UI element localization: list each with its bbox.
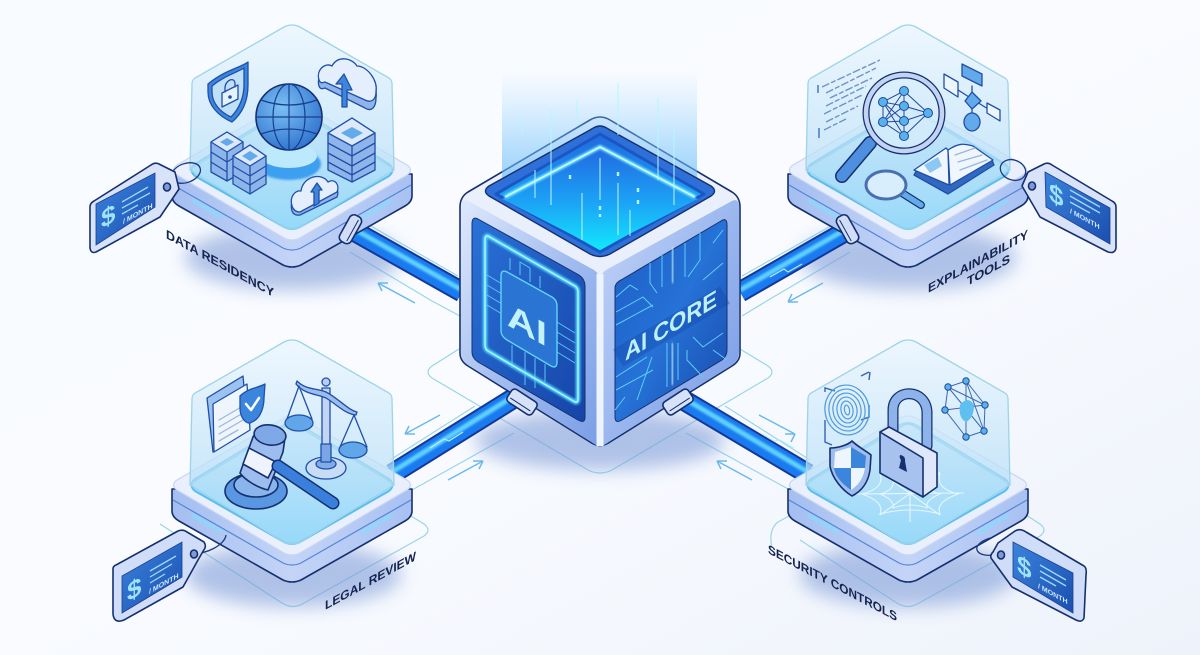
price tag: data residency: $ [101,197,116,235]
AI chip: AI [507,295,547,354]
AI CORE text: AI CORE [625,284,717,367]
icon: network mesh [942,378,988,440]
icon: shield with lock [208,62,248,122]
price tag: legal review [113,530,226,621]
label: data residency: DATA RESIDENCY [166,227,274,300]
glass panel: legal review [190,340,394,544]
price tag: security controls: / MONTH [1038,581,1068,606]
panel: legal review [113,340,416,621]
pipe collar: data residency [337,213,363,246]
price tag: data residency: / MONTH [123,201,153,226]
platform: data residency [172,101,412,267]
icon: scales of justice [285,378,367,479]
label: explainability tools: EXPLAINABILITY [928,227,1028,296]
cube body [460,117,740,446]
price tag: legal review: / MONTH [149,571,179,596]
code lines [818,60,880,138]
icon: server stack left [211,132,266,194]
right face panel [615,220,727,421]
AI chip [501,271,557,367]
panel: AI core cube [460,72,740,446]
icon: upload cloud [318,59,376,110]
web pattern on floor [856,465,964,522]
panel: data residency [90,25,412,300]
price tag: security controls [977,530,1086,621]
price tag: security controls: $ [1017,549,1032,586]
label: explainability tools: TOOLS [967,251,1010,289]
platform: legal review [172,416,412,582]
ground outlines and flow lines [160,218,1044,606]
label: legal review: LEGAL REVIEW [325,549,416,613]
icon: fingerprint [821,372,873,445]
platform: explainability tools [788,101,1028,267]
icon: globe on pedestal [256,84,322,180]
icon: large magnifier with neural net [842,75,942,176]
left face panel [472,218,585,421]
price tag: explainability tools [997,156,1116,252]
panel: security controls [768,340,1086,624]
pipe collars on cube [505,388,695,416]
cube top well [486,126,714,256]
panel: explainability tools [788,25,1116,296]
icon: document with shield [207,376,265,452]
glass panel: explainability tools [806,25,1010,229]
icon: gavel [225,423,333,509]
icon: small magnifier [866,171,921,205]
icon: flowchart [944,64,1000,131]
icon: open book [914,144,994,194]
glass panel: data residency [190,25,394,229]
pipe collar: explainability tools [835,213,861,246]
light beam [502,72,697,250]
icon: checker shield [830,441,871,496]
glass panel: security controls [806,340,1010,544]
label: security controls: SECURITY CONTROLS [768,542,897,624]
icon: server stack right [328,118,375,182]
icon: padlock [880,394,937,497]
icon: small upload cloud [291,176,338,215]
soft shadows [185,226,1016,607]
data streaks [522,83,674,240]
price tag: explainability tools: / MONTH [1070,206,1100,231]
platform: security controls [788,416,1028,582]
price tag: explainability tools: $ [1049,177,1064,214]
arrow: flow arrows [378,283,823,480]
price tag: legal review: $ [127,570,142,608]
connector pipes [345,224,855,474]
price tag: data residency [90,159,203,252]
